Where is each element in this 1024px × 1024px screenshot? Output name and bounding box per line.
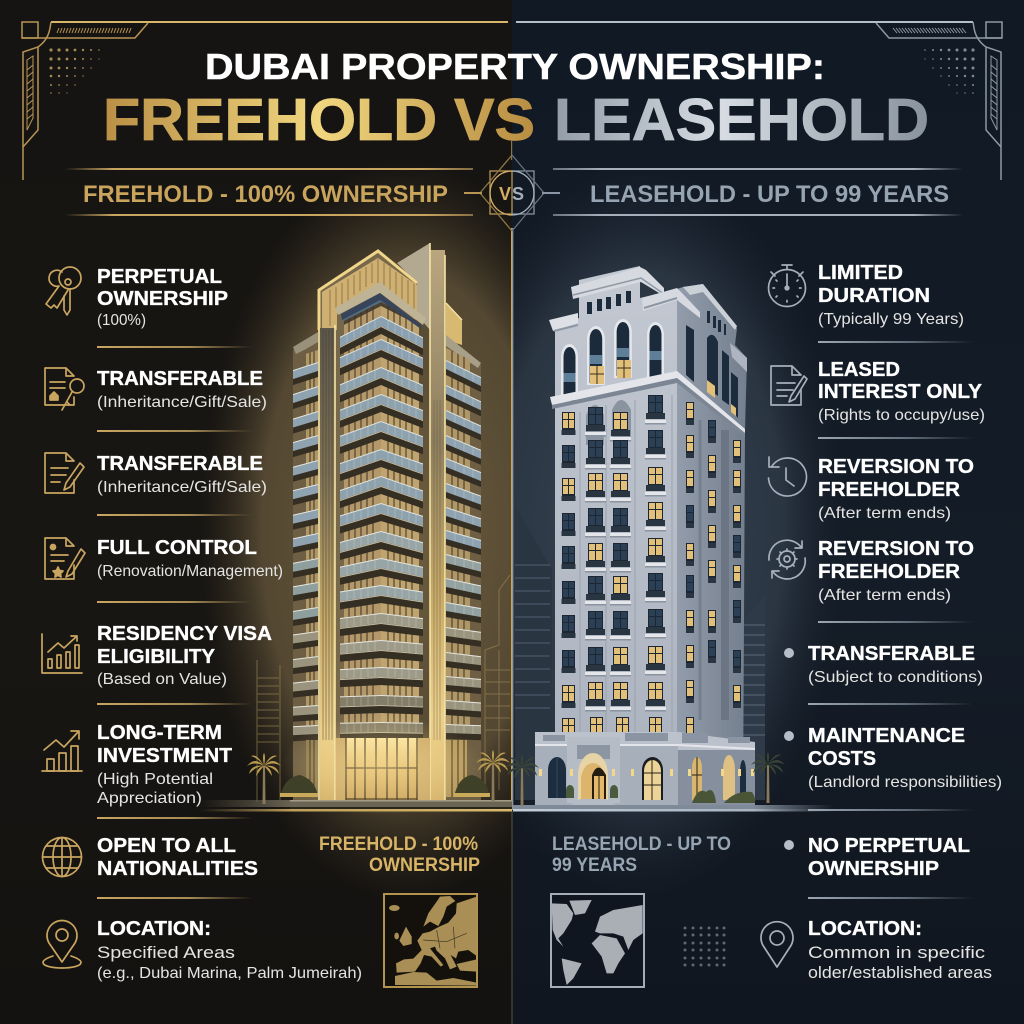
item: transferable 2: (Inheritance/Gift/Sale) <box>97 479 267 496</box>
palm trees silver <box>505 752 785 806</box>
item: long-term investment: INVESTMENT <box>97 744 232 767</box>
VS emblem: S <box>512 184 524 204</box>
item: residency visa: (Based on Value) <box>97 671 227 688</box>
item: reversion to freeholder 2 <box>769 537 974 623</box>
item: reversion to freeholder 2: (After term ends) <box>818 587 951 604</box>
item: reversion to freeholder 1: (After term ends) <box>818 505 951 522</box>
item: reversion to freeholder 2: REVERSION TO <box>818 537 974 560</box>
title: FREEHOLD VS <box>103 87 535 153</box>
item: maintenance costs: (Landlord responsibilities) <box>808 774 1002 791</box>
item: limited duration <box>768 261 973 343</box>
label: freehold: FREEHOLD - 100% <box>319 834 478 855</box>
item: limited duration: (Typically 99 Years) <box>818 311 964 328</box>
item: location leasehold: Common in specific <box>808 943 986 962</box>
item: leased interest only: LEASED <box>818 358 900 381</box>
item: reversion to freeholder 1: REVERSION TO <box>818 455 974 478</box>
item: open to all nationalities: OPEN TO ALL <box>97 834 236 857</box>
item: long-term investment: Appreciation) <box>97 790 202 807</box>
label: leasehold: LEASEHOLD - UP TO <box>552 834 731 855</box>
item: residency visa: RESIDENCY VISA <box>97 622 272 645</box>
item: location leasehold <box>761 917 992 982</box>
right panel background <box>512 0 1024 1024</box>
icon: globe <box>42 838 82 876</box>
item: full control: FULL CONTROL <box>97 536 257 559</box>
item: location freehold: Specified Areas <box>97 943 235 962</box>
item: maintenance costs <box>784 724 1002 811</box>
label: leasehold: 99 YEARS <box>552 855 637 876</box>
item: leased interest only <box>771 358 985 439</box>
item: transferable leasehold <box>784 642 983 705</box>
item: transferable 1 <box>45 367 267 432</box>
dot grid <box>684 926 726 966</box>
item: transferable leasehold: TRANSFERABLE <box>808 642 975 665</box>
item: residency visa: ELIGIBILITY <box>97 645 215 668</box>
item: transferable 1: TRANSFERABLE <box>97 367 263 390</box>
subheading: leasehold: LEASEHOLD - UP TO 99 YEARS <box>590 181 949 208</box>
leasehold tower <box>513 266 833 812</box>
item: leased interest only: INTEREST ONLY <box>818 380 982 403</box>
icon: location pin <box>43 921 81 968</box>
item: location freehold: (e.g., Dubai Marina, Palm Jumeirah) <box>97 965 362 982</box>
item: maintenance costs: COSTS <box>808 747 876 770</box>
icon: location pin <box>761 922 793 967</box>
item: location leasehold: older/established areas <box>808 963 992 982</box>
center divider line <box>511 140 513 1024</box>
icon: lease document <box>771 366 807 405</box>
item: full control: (Renovation/Management) <box>97 563 283 580</box>
right frame ornament <box>516 22 1002 180</box>
title <box>103 46 929 153</box>
item: long-term investment: LONG-TERM <box>97 721 222 744</box>
item: reversion to freeholder 1 <box>768 455 974 522</box>
map: world <box>551 894 644 987</box>
icon: contract with star <box>45 538 85 579</box>
title: LEASEHOLD <box>554 87 929 153</box>
item: perpetual ownership <box>46 265 252 348</box>
subheading: freehold: FREEHOLD - 100% OWNERSHIP <box>83 181 448 208</box>
icon: deed and key <box>45 368 84 410</box>
VS emblem <box>464 155 560 231</box>
label: freehold <box>319 834 480 876</box>
icon: document and pen <box>45 453 84 493</box>
item: no perpetual ownership: OWNERSHIP <box>808 857 939 880</box>
left frame ornament <box>22 22 508 180</box>
background towers left <box>257 575 510 802</box>
item: leased interest only: (Rights to occupy/use) <box>818 407 985 424</box>
item: reversion to freeholder 2: FREEHOLDER <box>818 560 960 583</box>
item: maintenance costs: MAINTENANCE <box>808 724 965 747</box>
item: open to all nationalities: NATIONALITIES <box>97 857 258 880</box>
icon: rising bar chart <box>42 634 82 673</box>
item: transferable 2 <box>45 452 267 516</box>
left panel background <box>202 167 512 890</box>
item: full control <box>45 536 283 603</box>
item: residency visa <box>42 622 272 705</box>
freehold tower <box>200 243 512 815</box>
item: open to all nationalities <box>42 834 258 899</box>
item: location freehold <box>43 917 362 982</box>
item: location leasehold: LOCATION: <box>808 917 922 940</box>
item: long-term investment <box>42 721 252 819</box>
item: transferable 2: TRANSFERABLE <box>97 452 263 475</box>
icon: keys <box>46 267 81 315</box>
item: long-term investment: (High Potential <box>97 771 213 788</box>
VS emblem: V <box>499 184 511 204</box>
item: reversion to freeholder 1: FREEHOLDER <box>818 478 960 501</box>
item: perpetual ownership: (100%) <box>97 312 146 329</box>
item: transferable leasehold: (Subject to conditions) <box>808 669 983 686</box>
palm trees gold <box>247 750 510 804</box>
item: location freehold: LOCATION: <box>97 917 211 940</box>
map: europe <box>384 894 477 987</box>
icon: investment chart <box>42 731 82 771</box>
icon: clock with return arrow <box>768 457 806 496</box>
background towers right <box>515 505 765 800</box>
item: limited duration: DURATION <box>818 284 930 307</box>
icon: gear cycle <box>769 540 805 579</box>
title: DUBAI PROPERTY OWNERSHIP: <box>205 46 825 87</box>
dot pattern top left <box>49 48 100 94</box>
item: perpetual ownership: PERPETUAL <box>97 265 222 288</box>
label: freehold: OWNERSHIP <box>369 855 480 876</box>
label: leasehold <box>552 834 731 876</box>
item: no perpetual ownership: NO PERPETUAL <box>808 834 970 857</box>
item: limited duration: LIMITED <box>818 261 903 284</box>
item: perpetual ownership: OWNERSHIP <box>97 287 228 310</box>
item: transferable 1: (Inheritance/Gift/Sale) <box>97 394 267 411</box>
dot pattern top right <box>924 48 975 94</box>
item: no perpetual ownership <box>784 834 973 899</box>
icon: stopwatch <box>768 265 806 306</box>
